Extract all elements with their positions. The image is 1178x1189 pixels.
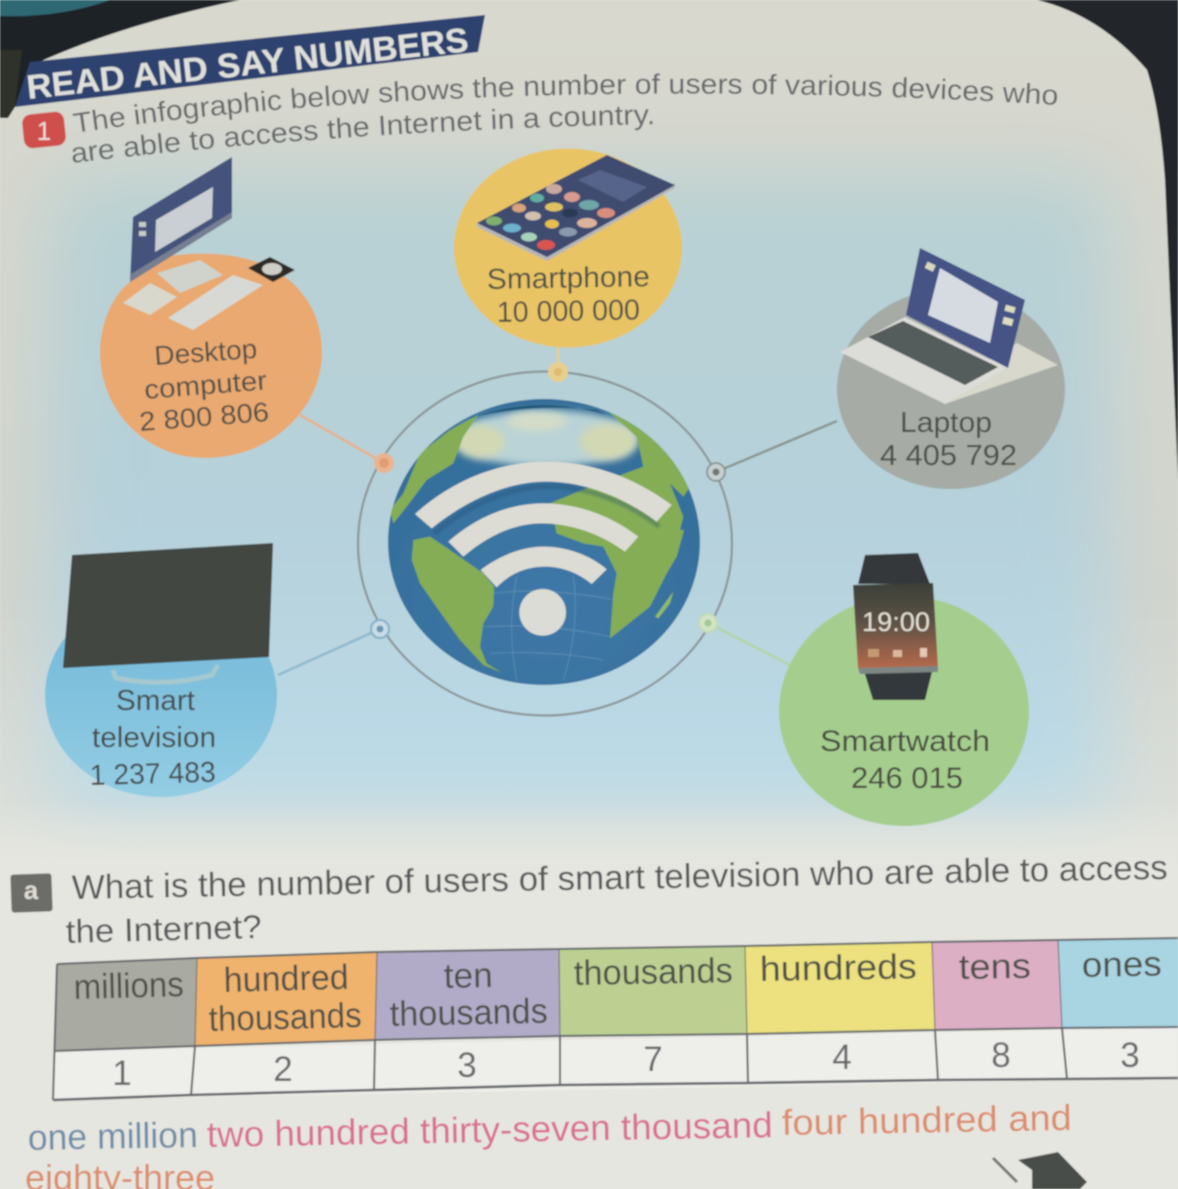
introduction text — [72, 72, 1058, 164]
globe with wifi symbol — [380, 395, 710, 690]
icon: television — [63, 543, 273, 682]
icon: graduation cap — [993, 1152, 1087, 1189]
desktop circle — [100, 254, 322, 458]
table column headings: ten — [443, 956, 493, 996]
question a text — [65, 849, 1168, 950]
icon: smartwatch: 19:00 — [862, 607, 930, 637]
table column headings: hundreds — [759, 947, 917, 989]
desktop label — [138, 334, 270, 437]
table digits: 7 — [643, 1040, 663, 1079]
panel: desktop computer — [100, 157, 322, 458]
table digits — [112, 1036, 1140, 1093]
globe — [380, 395, 710, 690]
icon: smartphone — [477, 155, 675, 261]
table column headings: tens — [958, 947, 1031, 987]
panel: smartwatch — [779, 553, 1029, 826]
introduction text: The infographic below shows the number of users of various devices who — [72, 72, 1058, 132]
table digits: 3 — [1120, 1036, 1140, 1075]
smartphone label: Smartphone — [487, 261, 650, 296]
table digits: 3 — [457, 1046, 477, 1085]
table digits: 1 — [112, 1054, 132, 1093]
television label: television — [92, 722, 216, 754]
desktop label: computer — [143, 365, 268, 405]
icon: smartwatch — [853, 553, 938, 700]
smartphone label — [487, 261, 650, 329]
table column headings: thousands — [208, 996, 362, 1039]
icon: laptop — [840, 248, 1058, 404]
laptop label: 4 405 792 — [880, 440, 1017, 472]
laptop circle — [837, 289, 1065, 489]
smartphone circle — [454, 148, 682, 348]
table column headings — [73, 945, 1162, 1039]
table grid — [53, 938, 1178, 1100]
laptop label — [880, 407, 1017, 472]
question number badge — [21, 111, 67, 149]
television circle — [45, 593, 277, 797]
panel: laptop — [837, 248, 1065, 489]
connector lines — [278, 345, 837, 675]
number in words: one million — [27, 1114, 198, 1158]
introduction text: are able to access the Internet in a country. — [72, 106, 654, 164]
table digits: 4 — [832, 1038, 852, 1077]
smartwatch label: Smartwatch — [820, 725, 990, 758]
television label: 1 237 483 — [89, 757, 216, 792]
icon: desktop computer — [123, 157, 295, 330]
question a text: What is the number of users of smart television who are able to access — [71, 849, 1168, 907]
smartwatch label — [820, 725, 990, 795]
laptop label: Laptop — [900, 407, 992, 439]
number in words — [25, 1097, 1072, 1189]
central ring with node dots — [358, 362, 732, 716]
smartphone label: 10 000 000 — [497, 295, 640, 329]
title banner: READ AND SAY NUMBERS: READ AND SAY NUMBERS — [25, 21, 470, 107]
television label — [89, 685, 216, 792]
table column headings: thousands — [389, 992, 548, 1034]
smartwatch label: 246 015 — [851, 762, 963, 795]
table column headings: hundred — [223, 958, 349, 1000]
table column headings: ones — [1081, 945, 1162, 985]
table header cells — [55, 938, 1178, 1051]
question a badge: a — [24, 875, 39, 905]
number in words: two hundred thirty-seven thousand — [206, 1104, 773, 1155]
number in words: four hundred and — [781, 1097, 1072, 1143]
question number badge: 1 — [37, 116, 51, 146]
desktop label: Desktop — [153, 334, 258, 371]
table column headings: thousands — [573, 951, 733, 993]
table value cells — [53, 1027, 1178, 1100]
smartwatch circle — [779, 596, 1029, 826]
question a badge — [10, 873, 53, 913]
table digits: 2 — [273, 1050, 293, 1089]
table digits: 8 — [991, 1036, 1011, 1075]
television label: Smart — [116, 685, 195, 717]
question a text: the Internet? — [65, 908, 262, 950]
desktop label: 2 800 806 — [138, 397, 270, 437]
panel: smartphone — [454, 148, 682, 348]
panel: smart television — [45, 543, 277, 797]
table column headings: millions — [73, 965, 184, 1007]
place value table — [53, 938, 1178, 1100]
